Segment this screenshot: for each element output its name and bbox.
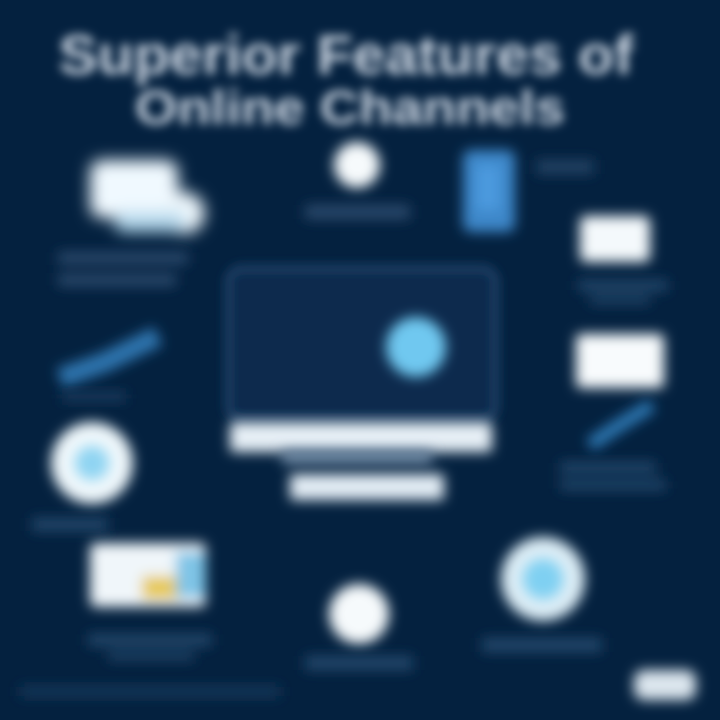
icon: left chart line bbox=[60, 336, 158, 378]
icon: right check stroke bbox=[590, 405, 652, 445]
label: left circle bbox=[32, 518, 108, 531]
icon: cloud top left bbox=[90, 160, 205, 234]
label: right check bbox=[560, 462, 666, 490]
label: bottom-left card bbox=[88, 634, 212, 660]
label: cloud bbox=[58, 252, 188, 286]
icon: right card 1 bbox=[580, 216, 650, 262]
icon: bottom circle bbox=[329, 584, 389, 644]
label: bottom circle bbox=[305, 656, 413, 670]
monitor sub bar bbox=[282, 450, 432, 464]
footer text bbox=[20, 686, 280, 697]
label: left chart bbox=[62, 392, 126, 401]
icon: left circle bbox=[51, 422, 133, 504]
label: right card 1 bbox=[578, 280, 668, 304]
title: Superior Features of bbox=[58, 23, 634, 86]
label: bottom-right circle bbox=[482, 638, 602, 652]
title bbox=[58, 23, 634, 135]
panel: central monitor bbox=[228, 268, 496, 500]
icon: bottom-right circle bbox=[501, 537, 585, 621]
icon: bottom-left card bbox=[90, 543, 206, 607]
monitor base bar bbox=[230, 422, 492, 452]
icon: top circle bbox=[334, 142, 380, 188]
logo: bottom right bbox=[634, 670, 696, 700]
monitor glow circle bbox=[386, 317, 446, 377]
label: phone bbox=[536, 160, 594, 174]
icon: right card 2 bbox=[576, 334, 664, 388]
monitor screen bbox=[228, 268, 496, 420]
icon: phone bbox=[463, 150, 515, 232]
label: top circle bbox=[305, 205, 410, 219]
monitor foot bbox=[290, 474, 444, 500]
title: Online Channels bbox=[135, 82, 565, 135]
